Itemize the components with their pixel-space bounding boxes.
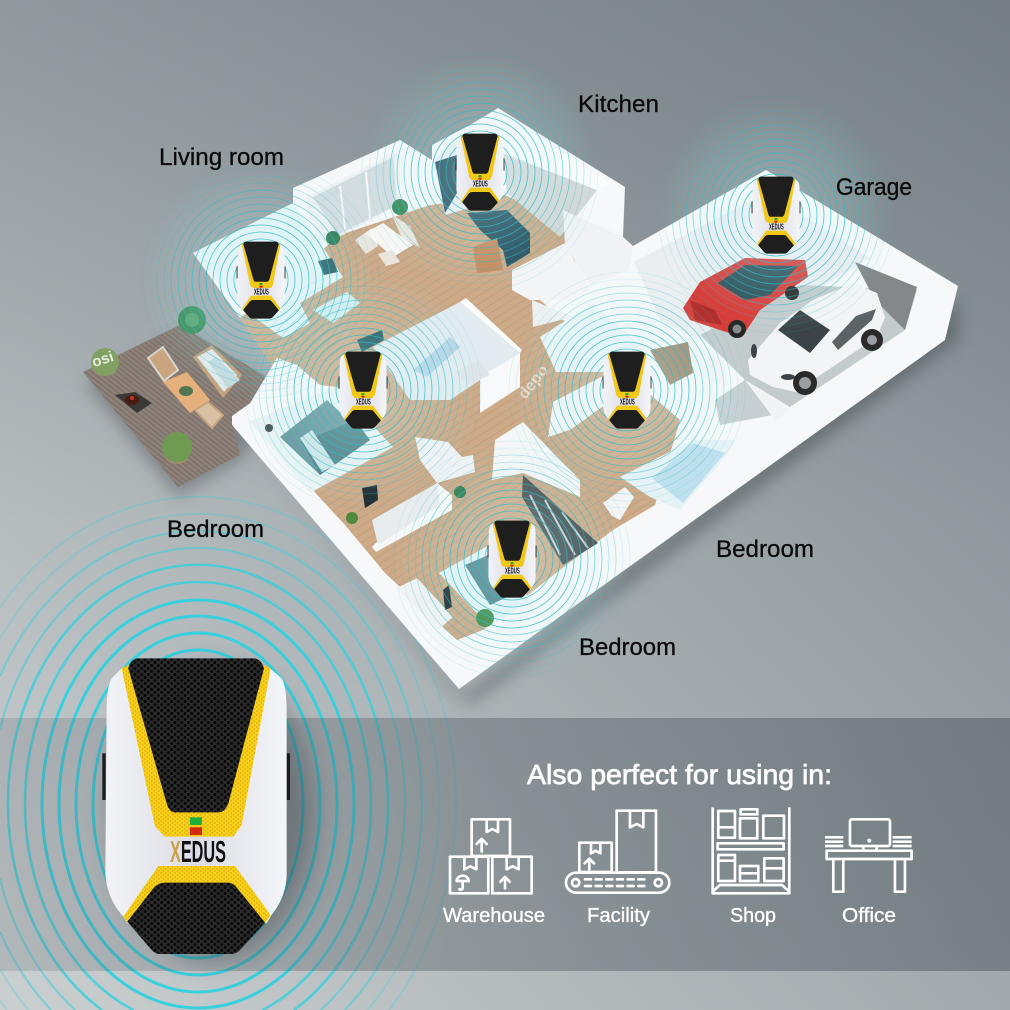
rug [313,292,360,323]
device: living room: XEDUS [254,288,269,297]
icon: plant desk [346,512,358,524]
desk [473,238,503,273]
device: bedroom left [339,352,387,429]
dark teal sofa right [467,210,530,267]
device: bedroom right [603,352,651,429]
device: bedroom left: XEDUS [356,398,371,407]
device: kitchen: XEDUS [473,180,488,189]
left bed [280,400,370,475]
kitchen wall [433,130,503,215]
label: Kitchen: Kitchen [578,91,659,118]
dark teal sofa left [435,155,457,213]
icon: shop [713,807,789,893]
watermark: osi [90,348,116,371]
sofa [193,345,242,398]
dining table [355,215,420,266]
icon: warehouse [450,819,532,893]
wall between rooms [372,437,475,552]
right room walls [540,303,728,437]
background top shade [0,0,1010,520]
chair dark [362,485,378,508]
living room carpet [193,203,343,338]
signal rings living room [143,162,379,398]
armchair [148,347,178,381]
signal rings bedroom right [509,272,745,508]
device: kitchen [456,134,504,211]
left bedroom wall [243,358,337,422]
signal rings kitchen [362,54,598,290]
icon: plant window [392,199,408,215]
brand text: XEDUS [170,834,226,869]
terrace [83,306,285,497]
red car [683,258,808,338]
right bedroom floor [620,440,737,510]
white chair [603,487,634,520]
garage interior [634,192,917,425]
label: Bedroom right: Bedroom [716,536,814,563]
barbecue [115,392,152,413]
nightstand [263,423,276,435]
label: Facility: Facility [587,905,650,927]
coffee table [163,372,210,413]
left bedroom floor [250,387,393,493]
label: Shop: Shop [730,905,776,927]
large device [102,658,315,960]
bathroom [373,298,522,413]
armchair small [195,402,223,428]
icon: plant dining [326,231,340,245]
cushion [318,258,338,275]
icon: office [825,819,912,892]
device: garage: XEDUS [769,223,784,232]
device: bedroom bottom [488,521,536,598]
label: Bedroom bottom: Bedroom [579,634,676,661]
floor plan building [193,108,960,705]
dark teal plant top of bedroom [357,330,384,352]
icon: plant bottom [162,432,192,464]
icon: plant left [91,348,119,376]
label: Office: Office [842,905,896,927]
central wall stub [512,210,633,300]
label: Bedroom left: Bedroom [167,516,264,543]
signal rings bedroom bottom [394,441,630,677]
kitchen cabinets [503,153,597,237]
outer shell [193,108,958,689]
label: Warehouse: Warehouse [443,905,545,927]
bottom desk [397,578,453,630]
device: bedroom bottom: XEDUS [505,567,520,576]
white car [748,283,885,395]
signal rings bedroom left [245,272,481,508]
device: garage [752,177,800,254]
device: living room [237,242,285,319]
right bed [652,443,725,503]
icon: facility [566,811,669,893]
kitchen inner wall [503,128,610,190]
label: Living room: Living room [159,144,284,171]
bottom room carpet [439,543,530,627]
window wall [305,150,400,245]
watermark: depo [515,362,552,403]
translucent band [0,718,1010,971]
label: Garage: Garage [836,174,912,201]
device: bedroom right: XEDUS [620,398,635,407]
door [532,300,573,327]
shelves [522,475,598,565]
heading: Also perfect for using in: [527,759,832,790]
wood floor [240,195,680,640]
icon: plant hall [454,486,466,498]
icon: plant top [178,306,206,334]
signal rings garage [658,97,894,333]
center partition [492,422,580,497]
chair dark 2 [443,585,452,610]
icon: plant bottom room [476,609,494,627]
signal rings of large device [0,497,456,1010]
